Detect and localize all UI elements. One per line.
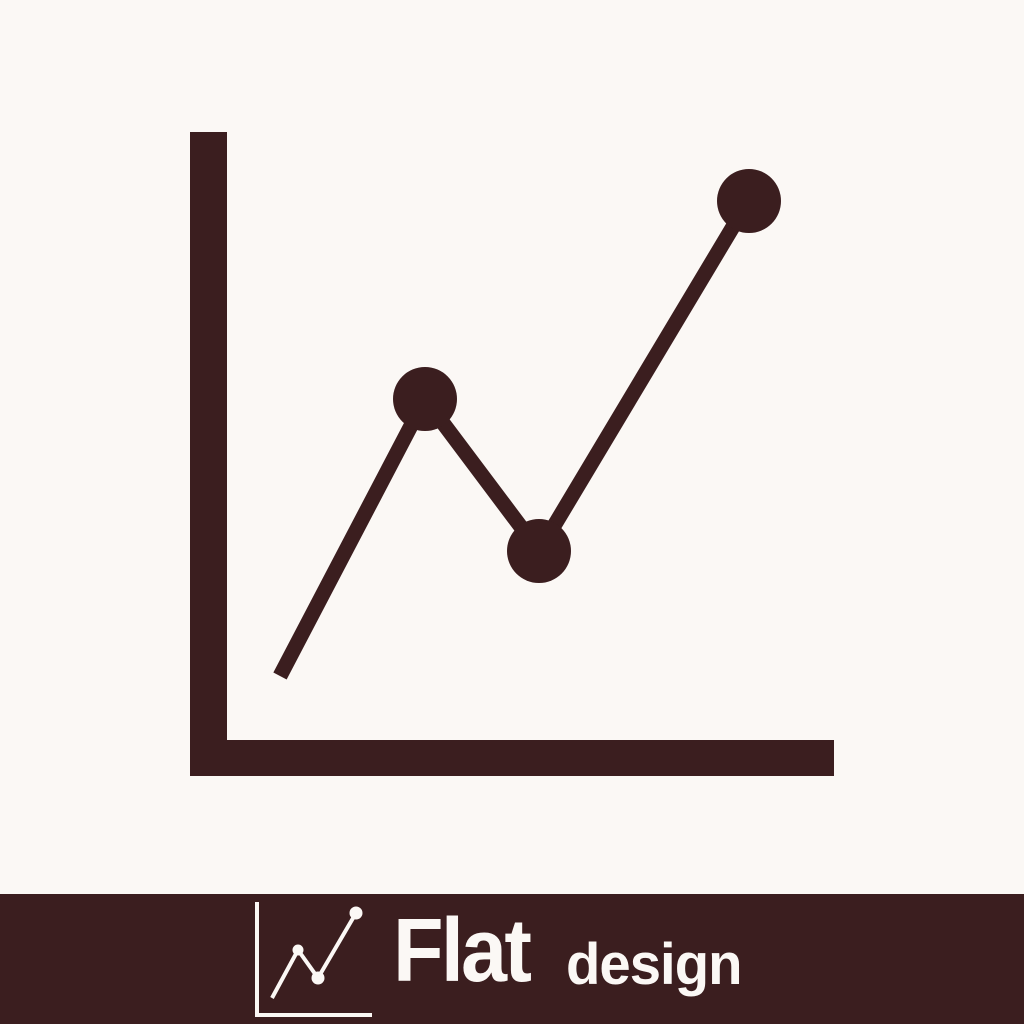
banner text: Flat: Flat xyxy=(393,901,529,1001)
banner icon xyxy=(255,902,372,1017)
banner text: design: design xyxy=(566,932,741,997)
points xyxy=(393,169,781,583)
banner xyxy=(0,894,1024,1024)
line xyxy=(280,200,749,676)
axes xyxy=(190,132,834,776)
